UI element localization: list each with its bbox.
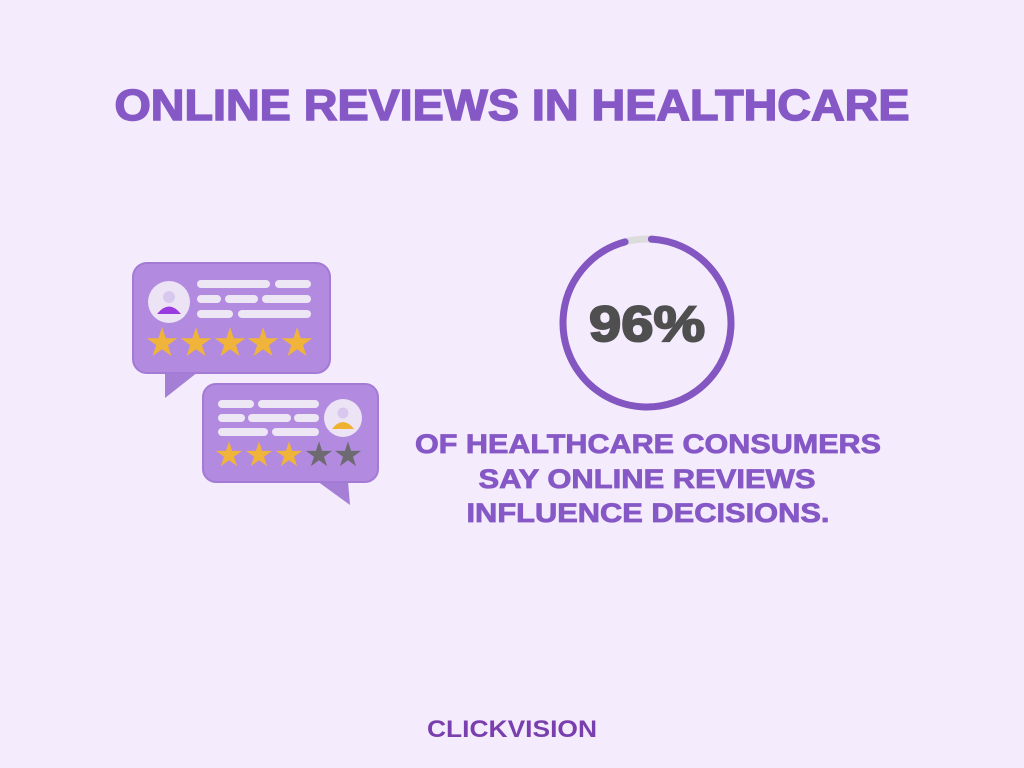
stars: 3 of 5: ★ [274,436,304,474]
illustration: review bubbles [133,263,378,505]
donut chart: 96% [559,235,735,411]
icon: avatar [324,399,362,437]
logo: clickvision: CLICKVISION [427,716,597,743]
stat description: INFLUENCE DECISIONS. [466,498,830,528]
stat description: SAY ONLINE REVIEWS [478,464,816,494]
stars: 3 of 5: ★ [214,436,244,474]
stars: 3 of 5: ★ [333,436,363,474]
stars: 3 of 5: ★ [304,436,334,474]
stars: 5 of 5: ★ [178,321,214,365]
stars: 5 of 5: ★ [144,321,180,365]
stars: 5 of 5: ★ [212,321,248,365]
stars: 5 of 5: ★ [245,321,281,365]
stat description [415,429,881,528]
stars: 3 of 5: ★ [244,436,274,474]
stars: 3 of 5 [214,436,363,474]
title: ONLINE REVIEWS IN HEALTHCARE [114,81,910,130]
bubble: five-star review [133,263,330,398]
icon: avatar [148,281,190,323]
bubble: three-star review [203,384,378,505]
stars: 5 of 5 [144,321,315,365]
stat description: OF HEALTHCARE CONSUMERS [415,429,881,459]
stars: 5 of 5: ★ [279,321,315,365]
stat value: 96% [589,296,705,352]
